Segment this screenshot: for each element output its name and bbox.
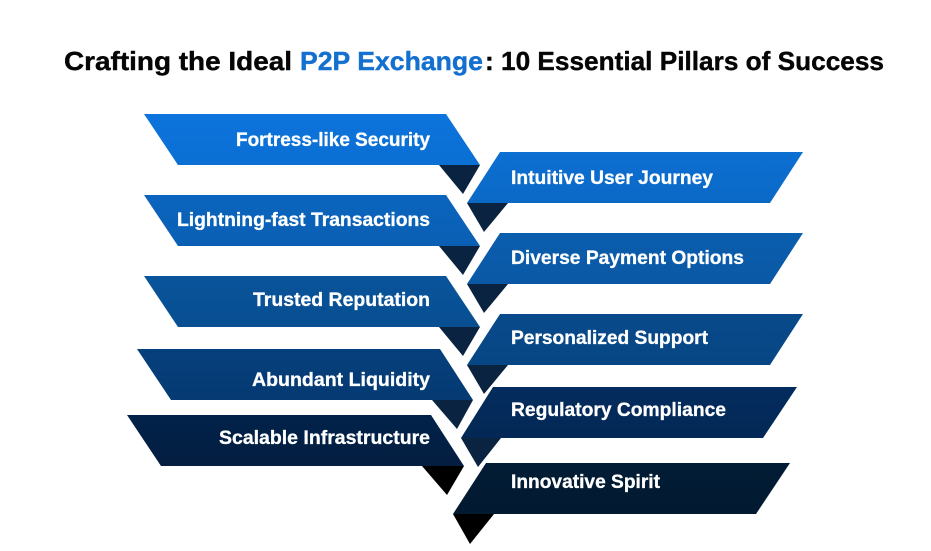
pillar: Diverse Payment Options — [467, 233, 803, 313]
pillar: Innovative Spirit: Innovative Spirit — [511, 472, 661, 493]
pillar: Personalized Support: Personalized Support — [511, 328, 709, 349]
pillar: Trusted Reputation: Trusted Reputation — [253, 290, 430, 311]
title: P2P Exchange — [300, 46, 483, 76]
pillar: Diverse Payment Options: Diverse Payment Options — [511, 248, 744, 269]
pillar: Intuitive User Journey: Intuitive User Journey — [511, 168, 713, 189]
pillar: Innovative Spirit — [453, 463, 790, 544]
pillar: Lightning-fast Transactions: Lightning-fast Transactions — [177, 210, 430, 231]
pillar: Abundant Liquidity: Abundant Liquidity — [252, 370, 430, 391]
pillar: Scalable Infrastructure — [127, 415, 464, 495]
pillar: Lightning-fast Transactions — [144, 195, 480, 275]
pillar: Regulatory Compliance — [461, 387, 797, 467]
pillar: Fortress-like Security: Fortress-like Security — [236, 130, 430, 151]
pillar: Personalized Support — [467, 314, 803, 394]
title: : 10 Essential Pillars of Success — [485, 46, 884, 76]
title — [64, 46, 884, 76]
pillar: Intuitive User Journey — [467, 152, 803, 232]
pillar: Regulatory Compliance: Regulatory Compliance — [511, 400, 726, 421]
pillar: Abundant Liquidity — [137, 349, 473, 429]
pillar: Scalable Infrastructure: Scalable Infrastructure — [219, 428, 430, 449]
pillar: Trusted Reputation — [144, 276, 480, 356]
pillar: Fortress-like Security — [144, 114, 480, 194]
title: Crafting the Ideal — [64, 46, 292, 76]
